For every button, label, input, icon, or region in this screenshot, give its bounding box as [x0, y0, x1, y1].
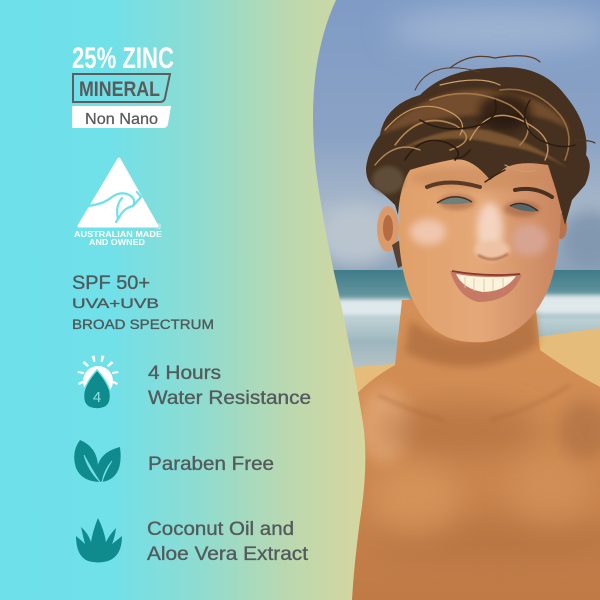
text: coconut oil and aloe vera extract: Aloe Vera Extract [147, 544, 309, 565]
cheek highlights [410, 219, 446, 245]
face [399, 160, 561, 342]
photo: smiling man on beach [300, 0, 600, 600]
mouth [450, 271, 522, 302]
mineral outlined label: MINERAL [79, 77, 160, 101]
sea [334, 270, 600, 367]
chest shading [359, 385, 600, 562]
logo: Australian Made and Owned: AND OWNED [89, 237, 145, 247]
text: 4 hours water resistance: 4 Hours [148, 363, 221, 384]
non nano white label: Non Nano [85, 111, 158, 128]
heading: 25% zinc: 25% ZINC [72, 42, 174, 75]
hair [366, 67, 590, 225]
icon: sun and water drop [78, 356, 118, 409]
icon: two leaves [74, 440, 121, 482]
text: coconut oil and aloe vera extract: Coconut Oil and [147, 519, 294, 540]
ears [377, 206, 399, 252]
eyebrows [427, 182, 480, 187]
sky [300, 0, 600, 272]
torso [345, 300, 600, 600]
sand [353, 328, 600, 392]
logo: Australian Made and Owned [74, 159, 162, 247]
text block: SPF 50+: UVA+UVB [72, 295, 159, 311]
registered mark: ® [156, 223, 162, 231]
eyes [439, 194, 475, 210]
gradient panel with curved edge [0, 0, 365, 600]
waves [320, 299, 410, 316]
text: paraben free: Paraben Free [148, 454, 274, 475]
hair curls [375, 56, 595, 182]
icon: white triangle with kangaroo [79, 159, 157, 226]
text block: SPF 50+: BROAD SPECTRUM [72, 316, 214, 332]
icon: aloe vera plant [76, 518, 122, 562]
text: coconut oil and aloe vera extract [147, 519, 309, 565]
neck shadow [405, 310, 538, 367]
text: 4 hours water resistance [148, 363, 311, 409]
text block: SPF 50+: SPF 50+ [72, 273, 150, 294]
back hair near ear [392, 240, 402, 268]
text block: SPF 50+ [72, 273, 214, 332]
text: 4 hours water resistance: Water Resistance [148, 388, 311, 409]
icon: sun and water drop: 4 [93, 389, 101, 406]
logo caption: AUSTRALIAN MADE [74, 229, 162, 239]
badge: 25% zinc mineral non nano [72, 42, 174, 128]
